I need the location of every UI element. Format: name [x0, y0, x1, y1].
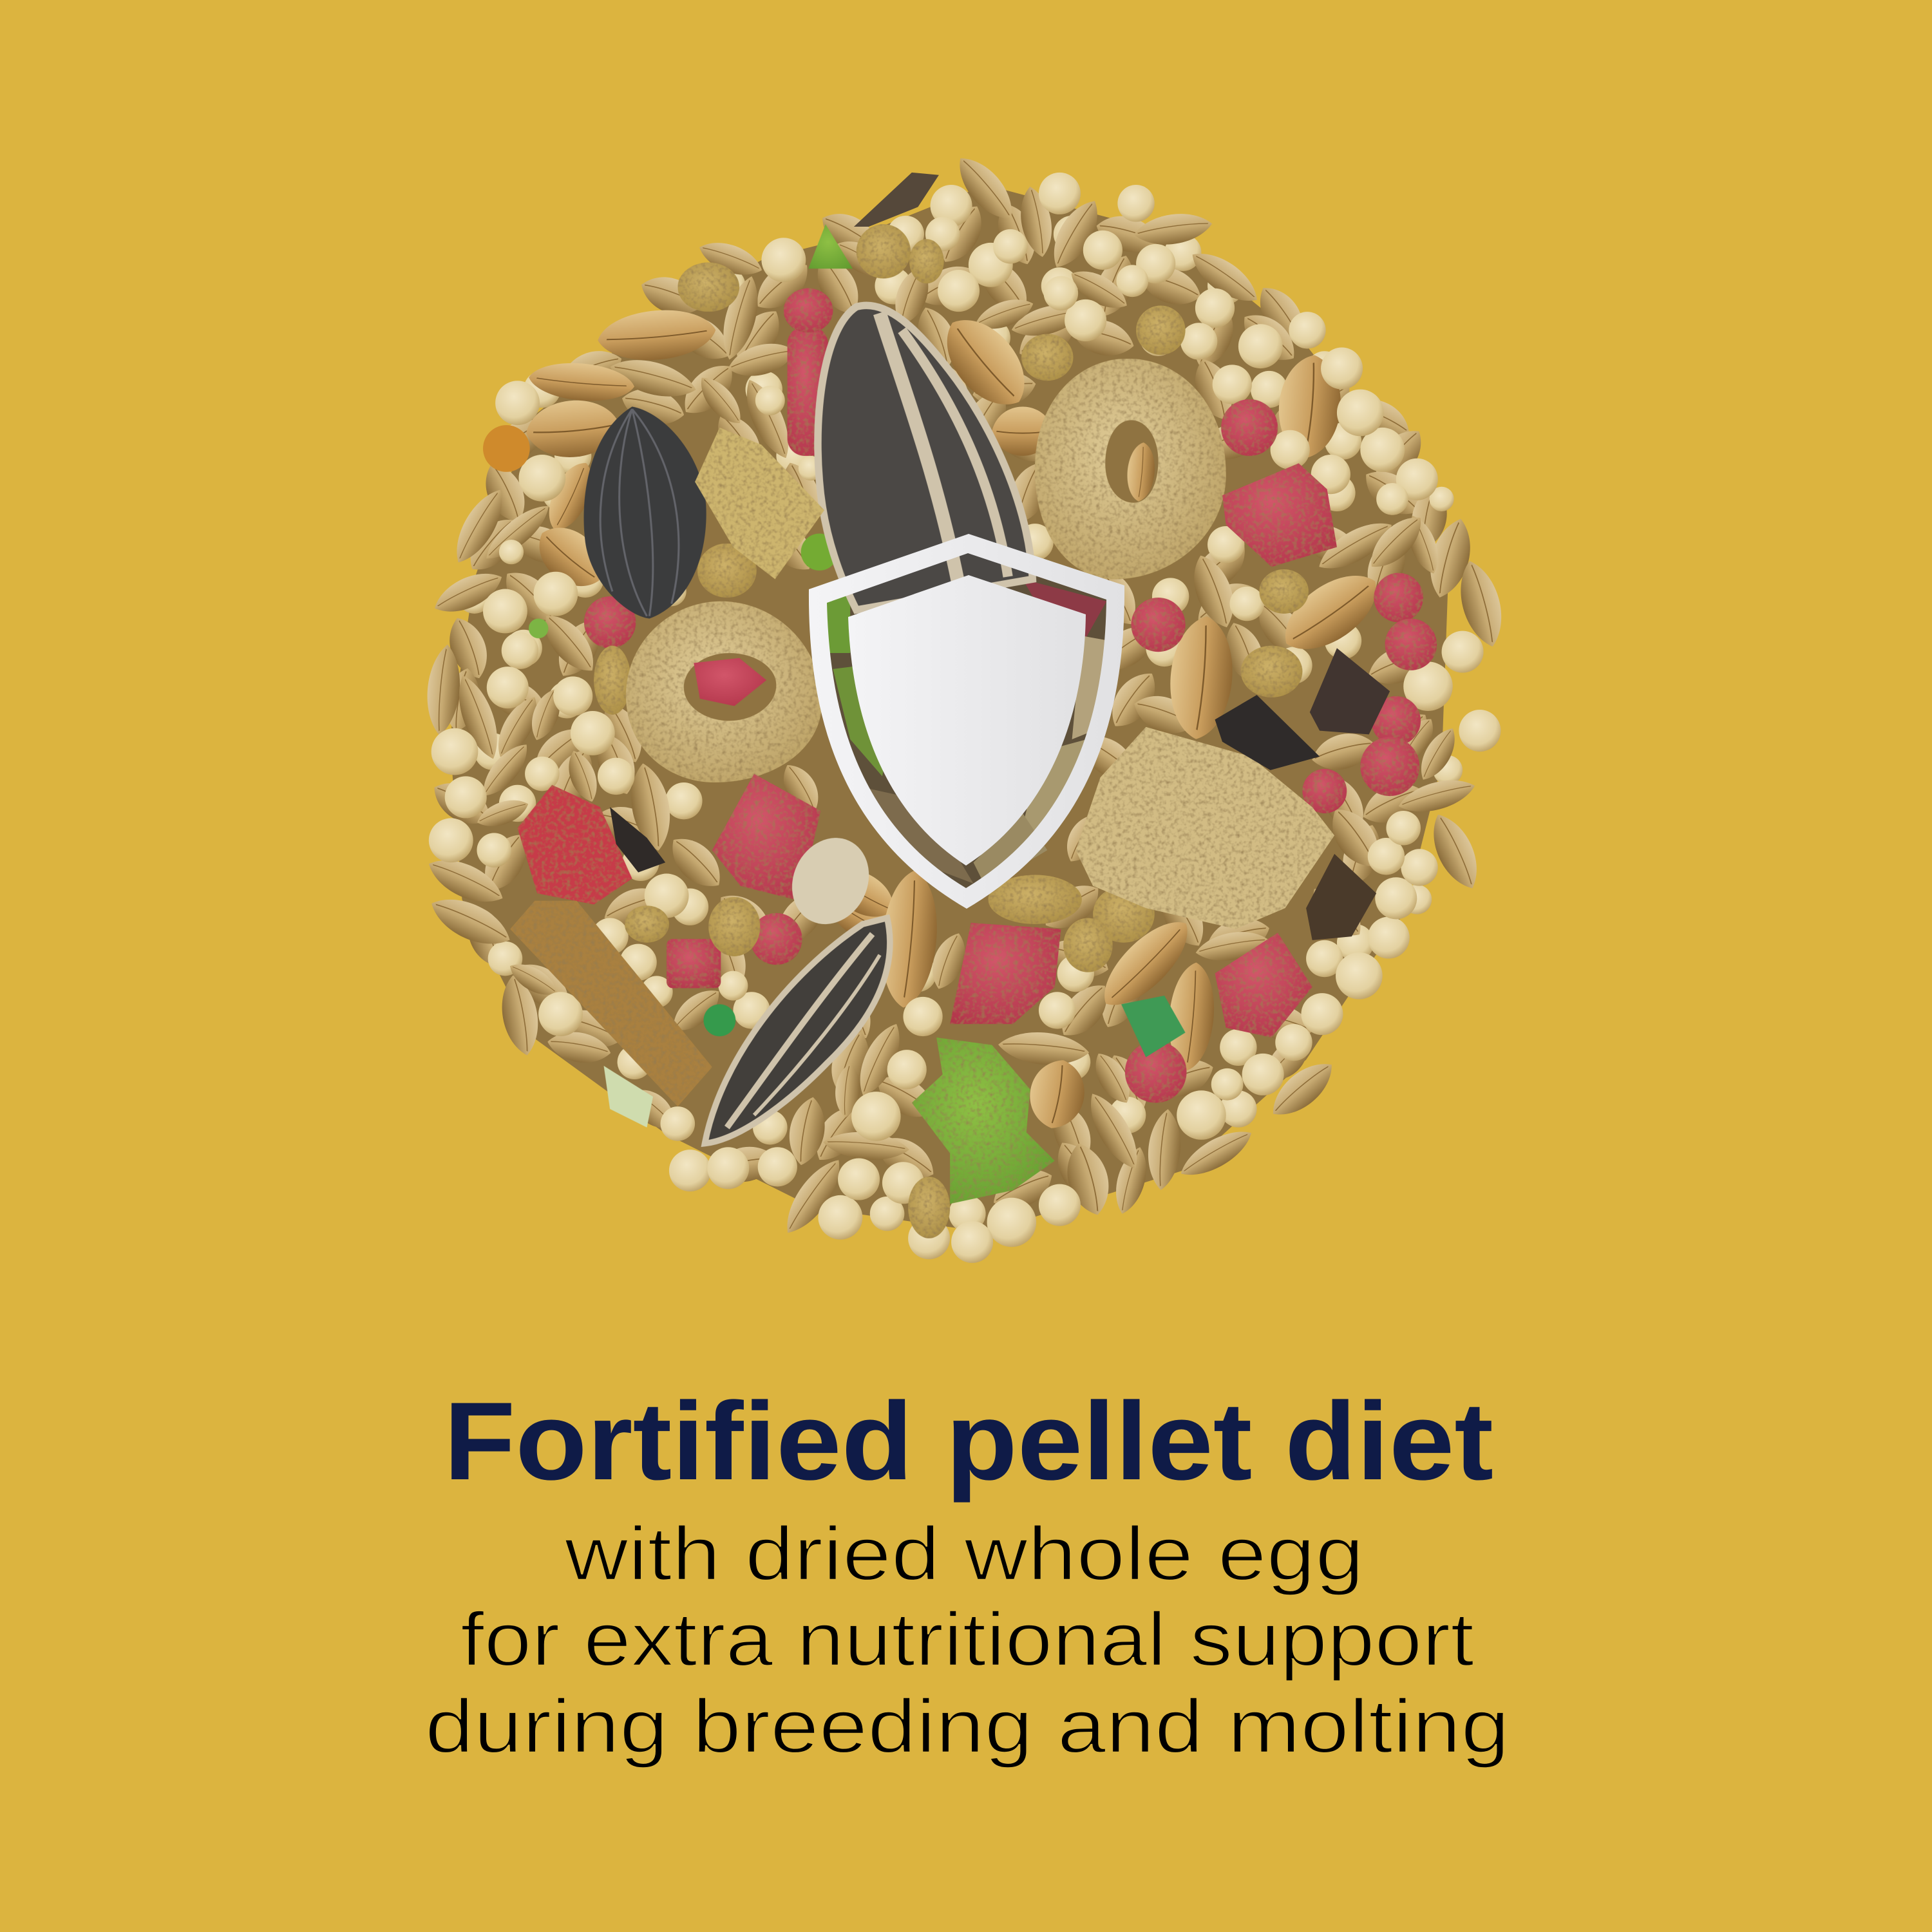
dark sunflower seed	[583, 406, 706, 618]
seeds visible through shield	[813, 542, 1119, 903]
pile shadow base	[450, 185, 1448, 1232]
dark brown chunk	[1310, 648, 1390, 734]
large grain chunk	[1075, 727, 1334, 929]
small red pellets	[584, 289, 1437, 1103]
red pellet bottom	[950, 923, 1061, 1024]
dark chunk	[1215, 695, 1320, 770]
green pellet	[912, 1037, 1055, 1204]
grain inside ring	[1125, 441, 1157, 502]
brown chunk	[1306, 854, 1376, 940]
shield inner plate	[848, 575, 1086, 866]
barley seeds	[422, 148, 1510, 1241]
red pellet left	[518, 785, 632, 904]
red pellet right top	[1222, 463, 1337, 567]
wheat and oat grains	[524, 304, 1390, 1133]
brown stick pellet	[510, 901, 712, 1106]
cereal ring left	[626, 601, 822, 782]
subtitle line 3: during breeding and molting	[425, 1684, 1510, 1769]
striped sunflower seed	[818, 305, 1032, 610]
shield icon	[809, 534, 1124, 909]
subtitle line 1: with dried whole egg	[564, 1511, 1364, 1596]
shield outer ring	[809, 534, 1124, 909]
long sunflower seed	[705, 918, 890, 1144]
dark pieces	[610, 173, 939, 873]
millet seeds	[429, 173, 1501, 1263]
red pellet bottom right	[1215, 933, 1312, 1037]
pale nut	[778, 825, 883, 937]
title: Fortified pellet diet	[444, 1379, 1493, 1503]
red pellet inside ring	[694, 658, 766, 706]
tan crumbs	[594, 224, 1309, 1238]
filler seeds layer	[426, 198, 1463, 1232]
cereal ring right	[1035, 359, 1226, 579]
seed mix pile	[422, 148, 1510, 1263]
red pellet middle	[712, 774, 820, 901]
grain chunk top left	[695, 428, 824, 579]
orange kernel	[483, 425, 530, 472]
small green pellets	[529, 224, 1186, 1128]
subtitle line 2: for extra nutritional support	[460, 1597, 1474, 1682]
